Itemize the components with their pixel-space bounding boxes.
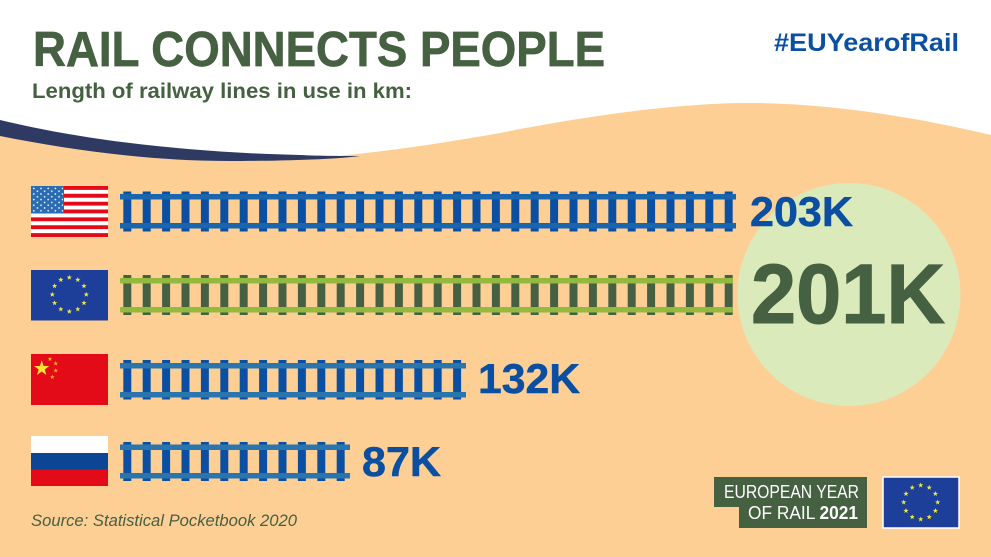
row: EU — [31, 247, 945, 341]
value: 87K: 87K — [362, 438, 441, 485]
value: 201K: 201K — [751, 247, 945, 341]
flag: China — [31, 354, 108, 405]
title: RAIL CONNECTS PEOPLE — [33, 23, 605, 77]
value: 132K: 132K — [478, 355, 580, 402]
row: USA — [31, 186, 853, 237]
logo: EU flag — [883, 477, 959, 528]
badge: European Year of Rail 2021: OF RAIL 2021 — [748, 503, 858, 523]
railway track: Russia — [120, 442, 350, 481]
value: 203K: 203K — [750, 188, 853, 235]
flag: Russia — [31, 436, 108, 486]
flag: EU — [31, 270, 108, 320]
highlight circle — [738, 183, 960, 406]
railway track: China — [120, 360, 466, 400]
row: China — [31, 354, 580, 405]
source note: Source: Statistical Pocketbook 2020 — [31, 512, 298, 530]
navy wave accent — [0, 120, 360, 161]
railway track: USA — [120, 192, 736, 232]
railway track: EU — [120, 275, 733, 315]
hashtag: #EUYearofRail — [774, 29, 959, 57]
badge: European Year of Rail 2021 — [714, 477, 867, 528]
badge: European Year of Rail 2021: EUROPEAN YEAR — [724, 482, 859, 502]
subtitle: Length of railway lines in use in km: — [32, 80, 412, 103]
row: Russia — [31, 436, 441, 486]
flag: USA — [31, 186, 108, 237]
